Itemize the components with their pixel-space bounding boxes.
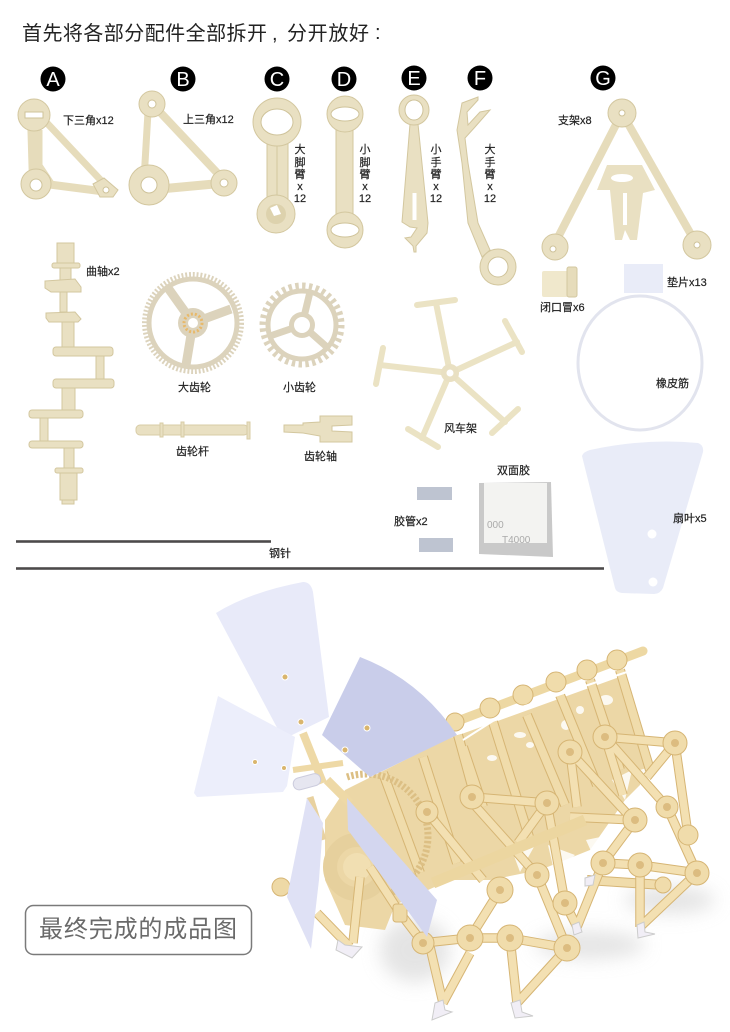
part C: large leg arm [253, 98, 301, 233]
washer sheet [624, 264, 663, 293]
badges A to G [40, 66, 616, 92]
blade right [322, 657, 457, 777]
label: large leg arm: 脚 [294, 155, 306, 169]
top rod [447, 651, 643, 725]
label: large gear: 大齿轮 [178, 380, 211, 394]
label: large leg arm: 12 [294, 193, 306, 205]
label: large hand arm: 手 [484, 155, 496, 169]
rubber tubes [417, 487, 453, 552]
double sided tape [479, 482, 553, 557]
label: small leg arm: 脚 [360, 155, 370, 169]
label: large leg arm: 大 [294, 142, 306, 156]
label: support frame: 支架x8 [558, 114, 592, 127]
label: large hand arm: x [487, 181, 493, 193]
label: large leg arm: x [297, 181, 303, 193]
blade lower left [287, 798, 323, 949]
large gear [144, 274, 242, 372]
label: double sided tape: 双面胶 [497, 463, 530, 477]
badges A to G: G [595, 68, 611, 90]
label: small leg arm: 12 [359, 193, 371, 205]
title: , [272, 23, 278, 45]
badges A to G: E [407, 68, 421, 90]
label: upper triangle: 上三角x12 [183, 113, 234, 126]
small pivot [393, 904, 407, 922]
label: cap: 闭口冒x6 [540, 301, 585, 314]
steel needles [16, 540, 604, 570]
label: small leg arm: 小 [360, 143, 370, 156]
finished walker [194, 582, 715, 1020]
label: gear axle: 齿轮轴 [304, 449, 337, 463]
label: fan blade: 扇叶x5 [673, 511, 707, 525]
title: 首先将各部分配件全部拆开 [22, 22, 267, 45]
joints [412, 725, 709, 961]
badges A to G: B [176, 69, 190, 91]
label: small gear: 小齿轮 [283, 380, 316, 394]
caption box: 最终完成的成品图 [39, 916, 237, 943]
ground shadow [380, 886, 715, 982]
part F: large hand arm [457, 97, 516, 285]
string [463, 672, 627, 740]
label: windmill frame: 风车架 [444, 421, 477, 435]
label: large hand arm: 臂 [484, 168, 496, 181]
blade rivets [252, 674, 370, 770]
part D: small leg arm [327, 96, 363, 248]
gear axle [284, 416, 352, 442]
badges A to G: D [337, 69, 351, 91]
blade top [216, 582, 329, 737]
front legs [317, 737, 697, 1003]
feet [336, 875, 655, 1020]
label: small hand arm: 手 [430, 155, 442, 169]
label: rubber band: 橡皮筋 [656, 376, 689, 390]
part B: upper triangle [129, 91, 237, 205]
label: large hand arm: 12 [484, 193, 496, 205]
badges A to G: A [46, 69, 60, 91]
crankshaft [29, 243, 114, 504]
rubber band [578, 296, 702, 430]
label: small leg arm: 臂 [360, 168, 370, 181]
label: crankshaft: 曲轴x2 [86, 264, 120, 278]
gear rod [136, 422, 250, 439]
cap [542, 267, 577, 297]
fan blade [582, 442, 703, 594]
label: gear rod: 齿轮杆 [176, 444, 209, 458]
double sided tape: T4000 [502, 535, 531, 546]
label: steel needles: 钢针 [269, 546, 291, 560]
label: small hand arm: 12 [430, 193, 442, 205]
caption box [26, 906, 252, 954]
title: : [375, 22, 381, 44]
small gear [263, 286, 341, 364]
badges A to G: F [474, 68, 486, 90]
part E: small hand arm [399, 95, 429, 252]
body lattice [325, 675, 655, 930]
blade lower right [347, 798, 437, 937]
hub cap [292, 772, 322, 791]
badges A to G: C [270, 69, 284, 91]
label: large leg arm: 臂 [294, 168, 306, 181]
part A: lower triangle [18, 99, 118, 199]
drive gear [272, 733, 428, 896]
axle [433, 820, 585, 883]
label: small hand arm: 臂 [430, 168, 442, 181]
label: lower triangle: 下三角x12 [63, 114, 114, 127]
title [22, 22, 381, 45]
label: small leg arm: x [362, 181, 368, 193]
label: large hand arm: 大 [484, 142, 496, 156]
double sided tape: 000 [487, 520, 504, 531]
title: 分开放好 [287, 22, 369, 45]
label: small hand arm: x [433, 181, 439, 193]
windmill frame [376, 300, 522, 447]
part G: support frame [542, 99, 711, 260]
label: washer: 垫片x13 [667, 275, 707, 289]
back legs [383, 670, 663, 885]
label: small hand arm: 小 [430, 143, 442, 156]
label: rubber tubes: 胶管x2 [394, 514, 428, 528]
blade left [194, 696, 295, 797]
